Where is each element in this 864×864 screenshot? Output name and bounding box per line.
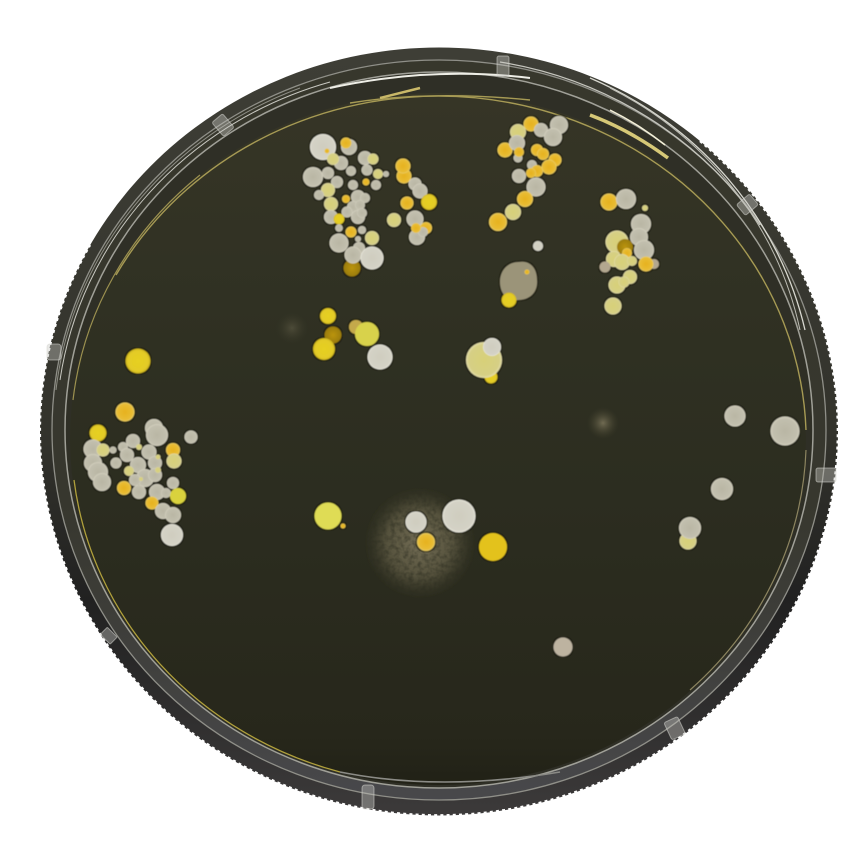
colony cluster: far left (84, 402, 198, 546)
lone colony and tan spreading colony (500, 241, 543, 308)
specular glare: top right (590, 115, 668, 158)
lid tabs (47, 56, 836, 809)
colony cluster: top centre arc (489, 116, 568, 231)
ribbed outer edge (40, 141, 838, 815)
golden meniscus lines (116, 96, 806, 430)
lone pinkish colony: bottom (554, 638, 572, 656)
fine rim lines: upper left (60, 82, 330, 380)
colony group: centre left (313, 308, 392, 370)
scattered colonies: right side (679, 406, 800, 550)
fine rim lines: upper right (500, 62, 760, 225)
colony group: lower centre (314, 500, 507, 561)
single yellow colony left (126, 348, 150, 374)
colony cluster: top right (600, 189, 659, 314)
grey lower rim highlight (340, 772, 560, 782)
faint halo spots (276, 312, 619, 599)
colony cluster: top left, right arm (387, 158, 437, 245)
bright rim line: top (330, 74, 530, 88)
colony cluster: top left (303, 134, 389, 276)
specular glare: top (380, 88, 420, 98)
agar surface (70, 88, 806, 785)
colony group: centre (466, 338, 502, 384)
